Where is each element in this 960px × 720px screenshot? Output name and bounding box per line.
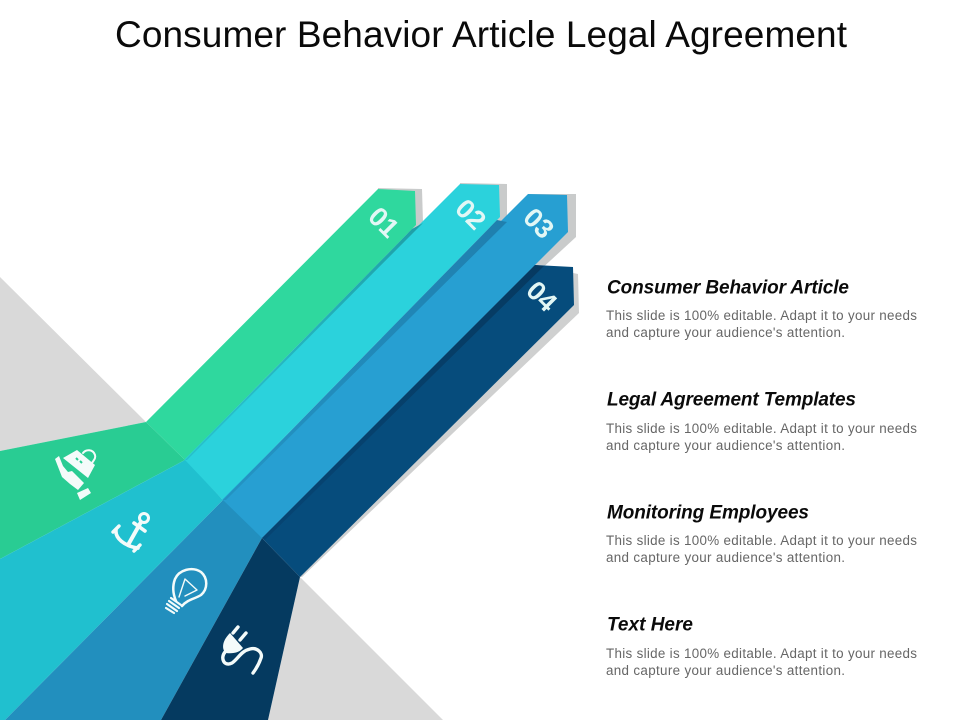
background triangle: lower right bbox=[268, 577, 443, 720]
text block 3: and capture your audience's attention. bbox=[606, 550, 845, 565]
text block 1: Consumer Behavior Article bbox=[607, 278, 849, 298]
ribbon 03 shadow strip bbox=[262, 265, 544, 540]
fold: cyan bbox=[0, 460, 223, 720]
text block 4 bbox=[606, 614, 917, 678]
ribbon 01 bbox=[146, 189, 416, 460]
text block 3 bbox=[606, 502, 917, 565]
text block 3: Monitoring Employees bbox=[607, 502, 809, 524]
text block 4: This slide is 100% editable. Adapt it to your needs bbox=[606, 646, 917, 661]
icon: hand holding shopping bag bbox=[55, 450, 95, 500]
icon: anchor bbox=[113, 514, 148, 551]
number 02: 02 bbox=[449, 193, 492, 236]
text block 2: Legal Agreement Templates bbox=[607, 390, 856, 410]
fold: navy bbox=[161, 538, 300, 720]
icon: electric plug bbox=[223, 627, 261, 673]
ribbon 03 bbox=[222, 194, 568, 539]
ribbon 02 bbox=[184, 184, 500, 500]
number 03: 03 bbox=[517, 202, 560, 245]
ribbon 01 shadow strip bbox=[185, 223, 423, 460]
ribbon 02 shadow strip bbox=[223, 220, 507, 500]
fold: green bbox=[0, 422, 185, 559]
text block 1: This slide is 100% editable. Adapt it to your needs bbox=[606, 308, 917, 323]
number 01: 01 bbox=[362, 201, 405, 244]
text block 2: This slide is 100% editable. Adapt it to your needs bbox=[606, 421, 917, 436]
ribbon shadows bbox=[300, 183, 579, 577]
text block 2 bbox=[606, 390, 917, 453]
ribbon 04 bbox=[262, 265, 574, 577]
text block 1: and capture your audience's attention. bbox=[606, 325, 845, 340]
text block 4: and capture your audience's attention. bbox=[606, 663, 845, 678]
number 04: 04 bbox=[520, 275, 563, 318]
fold: blue bbox=[5, 500, 262, 720]
icon: light bulb bbox=[166, 569, 206, 613]
background triangle: upper left bbox=[0, 277, 146, 451]
text block 2: and capture your audience's attention. bbox=[606, 438, 845, 453]
text block 1 bbox=[606, 278, 917, 340]
text block 4: Text Here bbox=[607, 614, 693, 636]
title: Consumer Behavior Article Legal Agreement bbox=[115, 14, 848, 55]
text block 3: This slide is 100% editable. Adapt it to your needs bbox=[606, 533, 917, 548]
